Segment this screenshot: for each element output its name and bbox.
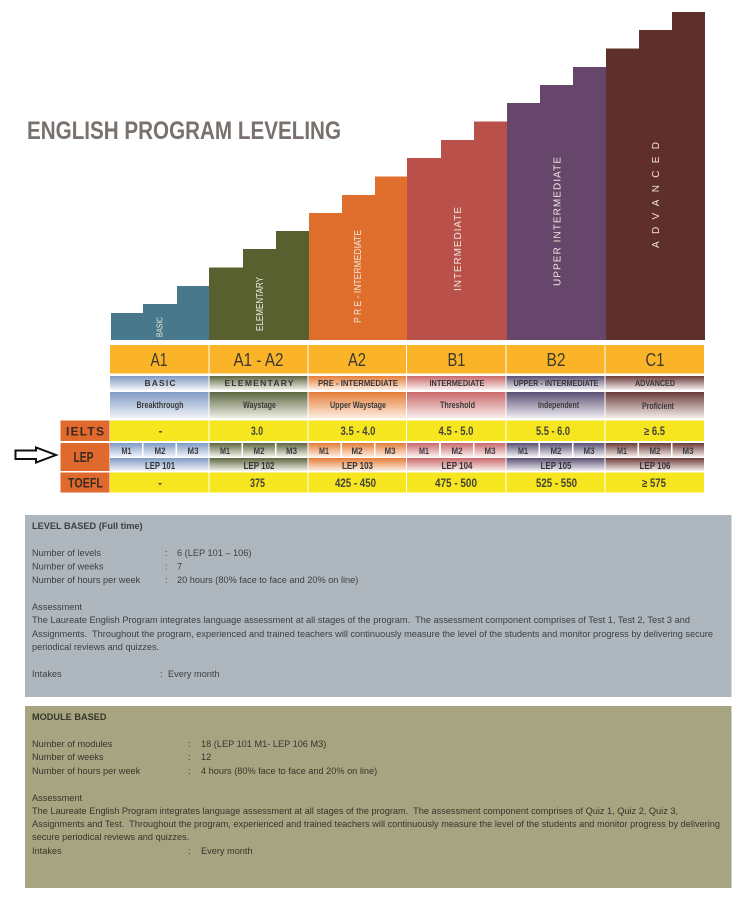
level based facts: Number of levels <box>32 548 101 558</box>
level based intakes: Every month <box>168 669 220 679</box>
row: stage names: Waystage <box>243 400 276 410</box>
heading: module based: MODULE BASED <box>32 712 107 722</box>
modules: M2 <box>452 446 462 456</box>
row: TOEFL: ≥ 575 <box>642 478 666 490</box>
module based facts: Number of hours per week <box>32 766 141 776</box>
row: CEFR levels: A1 <box>150 349 168 370</box>
row: stage names: Proficient <box>642 401 674 411</box>
row: IELTS: IELTS <box>66 424 104 438</box>
step group: elementary <box>209 231 309 340</box>
step group: basic: BASIC <box>156 317 164 337</box>
modules: M1 <box>518 446 528 456</box>
course codes: LEP 101 <box>145 461 175 472</box>
row: IELTS: 5.5 - 6.0 <box>536 426 570 438</box>
module based intakes: : <box>188 846 191 856</box>
modules: M1 <box>617 446 627 456</box>
level based facts: 6 (LEP 101 – 106) <box>177 548 251 558</box>
row: stage names: Breakthrough <box>136 400 184 410</box>
course codes <box>110 458 704 472</box>
step group: advanced <box>606 12 705 340</box>
row: CEFR levels: B1 <box>448 349 466 370</box>
level based intakes <box>32 669 220 679</box>
level based facts: : <box>165 548 168 558</box>
module based facts: 4 hours (80% face to face and 20% on line) <box>201 766 377 776</box>
row: IELTS: - <box>159 426 163 438</box>
row: level names: ELEMENTARY <box>224 378 294 388</box>
module based facts: : <box>188 752 191 762</box>
step group: intermediate <box>407 122 507 340</box>
module based assessment text: Assessment <box>32 793 82 803</box>
modules: M3 <box>584 446 594 456</box>
row: TOEFL: - <box>158 478 162 490</box>
step group: upper intermediate <box>507 67 606 340</box>
step group: advanced: ADVANCED <box>651 142 662 248</box>
row: stage names: Independent <box>538 400 579 410</box>
modules: M1 <box>419 446 429 456</box>
row: CEFR levels: A1 - A2 <box>234 349 284 370</box>
module based facts: 12 <box>201 752 211 762</box>
module based facts: Number of weeks <box>32 752 104 762</box>
modules: M3 <box>188 446 198 456</box>
arrow pointing to LEP <box>16 448 56 462</box>
course codes: LEP 102 <box>244 461 275 472</box>
module based assessment text: Assignments and Test. Throughout the program, experienced and trained teachers will continuously measure the level of the students and monitor progress by delivering <box>32 819 720 829</box>
row: CEFR levels <box>110 345 704 374</box>
module based assessment text <box>32 793 720 842</box>
level based facts: Number of weeks <box>32 562 104 572</box>
modules: M1 <box>319 446 329 456</box>
level based facts: Number of hours per week <box>32 575 141 585</box>
level based assessment text <box>32 602 713 652</box>
modules: M1 <box>220 446 230 456</box>
module based assessment text: secure periodical reviews and quizzes. <box>32 832 189 842</box>
module based intakes: Intakes <box>32 846 62 856</box>
level based intakes: : <box>160 669 163 679</box>
row: TOEFL: TOEFL <box>68 476 103 490</box>
step group: elementary: ELEMENTARY <box>255 277 266 331</box>
row: TOEFL: 425 - 450 <box>335 478 376 490</box>
modules: M1 <box>122 446 132 456</box>
module based facts <box>32 739 377 776</box>
level based assessment text: The Laureate English Program integrates language assessment at all stages of the program. The assessment component comprises of Test 1, Test 2, Test 3 and <box>32 615 690 625</box>
level based facts <box>32 548 358 585</box>
module based assessment text: The Laureate English Program integrates language assessment at all stages of the program. The assessment component comprises of Quiz 1, Quiz 2, Quiz 3, <box>32 806 678 816</box>
heading: level based: LEVEL BASED (Full time) <box>32 521 143 531</box>
level based assessment text: Assignments. Throughout the program, experienced and trained teachers will continuously measure the level of the students and monitor progress by delivering secure <box>32 629 713 639</box>
row: stage names: Upper Waystage <box>330 400 386 410</box>
level based assessment text: Assessment <box>32 602 82 612</box>
row: level names <box>110 376 704 390</box>
level based facts: : <box>165 575 168 585</box>
step group: upper intermediate: UPPER INTERMEDIATE <box>552 157 564 286</box>
row: CEFR levels: B2 <box>546 349 566 370</box>
step group: intermediate: INTERMEDIATE <box>453 207 464 291</box>
level table <box>60 345 704 492</box>
level based facts: 20 hours (80% face to face and 20% on line) <box>177 575 358 585</box>
level based assessment text: periodical reviews and quizzes. <box>32 642 159 652</box>
step group: basic <box>111 286 209 340</box>
module based facts: : <box>188 739 191 749</box>
modules: M3 <box>682 446 694 456</box>
row: TOEFL: 525 - 550 <box>536 478 577 490</box>
row: TOEFL: 375 <box>250 478 265 490</box>
module based facts: : <box>188 766 191 776</box>
row: IELTS: ≥ 6.5 <box>644 426 665 438</box>
modules: M3 <box>384 446 396 456</box>
modules: M2 <box>154 446 166 456</box>
row: CEFR levels: A2 <box>348 349 366 370</box>
row: IELTS: 3.0 <box>251 426 263 438</box>
row: level names: PRE - INTERMEDIATE <box>318 378 398 388</box>
title: ENGLISH PROGRAM LEVELING <box>27 117 341 145</box>
row: level names: INTERMEDIATE <box>430 378 485 388</box>
module based facts: Number of modules <box>32 739 113 749</box>
level based facts: 7 <box>177 562 182 572</box>
row: level names: ADVANCED <box>635 378 675 388</box>
row: CEFR levels: C1 <box>646 349 664 370</box>
modules: M3 <box>484 446 496 456</box>
course codes: LEP 104 <box>442 461 473 472</box>
row: stage names: Threshold <box>440 400 475 410</box>
modules: M2 <box>550 446 562 456</box>
row: TOEFL: 475 - 500 <box>435 478 477 490</box>
row: IELTS <box>60 420 704 441</box>
modules <box>110 443 704 457</box>
step group: pre-intermediate: P R E - INTERMEDIATE <box>353 230 364 323</box>
course codes: LEP 106 <box>640 461 671 472</box>
row: level names: BASIC <box>144 378 176 388</box>
modules: M3 <box>286 446 297 456</box>
module based intakes <box>32 846 253 856</box>
modules: M2 <box>650 446 660 456</box>
panel: level based <box>25 515 732 697</box>
step group: pre-intermediate <box>309 176 407 340</box>
row: IELTS: 3.5 - 4.0 <box>340 426 376 438</box>
row: TOEFL <box>60 472 704 492</box>
staircase chart <box>111 12 705 340</box>
panel: module based <box>25 706 732 888</box>
module based intakes: Every month <box>201 846 253 856</box>
modules: M2 <box>352 446 362 456</box>
course codes: LEP 105 <box>540 461 572 472</box>
module based facts: 18 (LEP 101 M1- LEP 106 M3) <box>201 739 326 749</box>
row: level names: UPPER - INTERMEDIATE <box>514 378 599 388</box>
row: LEP <box>60 443 704 472</box>
level based intakes: Intakes <box>32 669 62 679</box>
modules: M2 <box>254 446 264 456</box>
row: IELTS: 4.5 - 5.0 <box>438 426 474 438</box>
course codes: LEP 103 <box>342 461 373 472</box>
row: stage names <box>110 392 704 418</box>
row: LEP: LEP <box>74 449 94 466</box>
level based facts: : <box>165 562 168 572</box>
